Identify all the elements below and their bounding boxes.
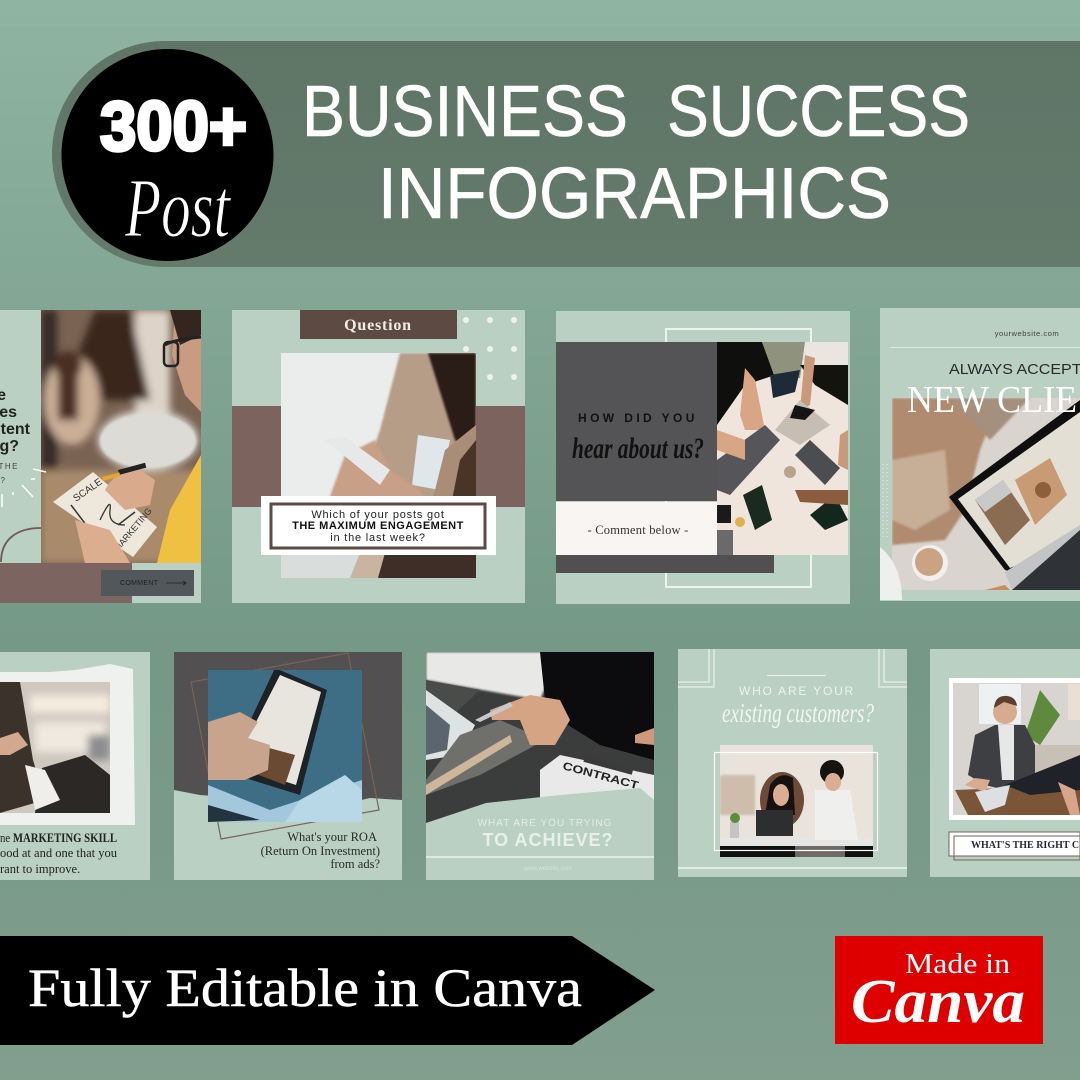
panel: post 2 question (232, 310, 525, 603)
white frame (714, 752, 878, 850)
cut-off question text: tent (1, 421, 31, 438)
cut-off question text (0, 387, 31, 485)
photo: hand with phone (208, 668, 362, 822)
white frame (949, 678, 1080, 820)
caption: ood at and one that you (0, 846, 118, 860)
cut-off question text: g? (0, 438, 19, 455)
caption: ne MARKETING SKILL (0, 831, 117, 845)
white caption box (261, 496, 496, 555)
torn white paper (0, 664, 135, 825)
heading: HOW DID YOU (578, 411, 698, 425)
panel: post 6 ROA (174, 652, 402, 880)
arrow banner: fully editable (0, 936, 655, 1045)
bottom rule (678, 867, 907, 869)
caption banner (949, 832, 1080, 860)
brown band (232, 406, 525, 507)
badge: 300+ post: Post (124, 162, 232, 255)
script line: existing customers? (722, 698, 874, 728)
cream panel: - Comment below - (588, 523, 688, 537)
badge: made in canva: Made in (905, 948, 1011, 980)
caption: from ads? (330, 857, 380, 871)
heading small: WHAT ARE YOU TRYING (478, 818, 612, 829)
photo: team laptops on table (717, 342, 848, 555)
title: SUCCESS (667, 72, 970, 152)
rule (426, 856, 654, 858)
top rule (767, 675, 826, 676)
caption: What's your ROA (287, 830, 377, 844)
white caption box: THE MAXIMUM ENGAGEMENT (292, 520, 464, 532)
question label: Question (344, 317, 412, 334)
script line: hear about us? (572, 432, 704, 465)
title: INFOGRAPHICS (378, 154, 891, 234)
white caption box: in the last week? (330, 532, 426, 544)
cut-off question text: ? (1, 476, 6, 485)
question label (300, 310, 457, 339)
arrow banner: fully editable: Fully Editable in Canva (28, 958, 582, 1018)
badge: made in canva: Canva (851, 968, 1025, 1036)
photo: two colleagues (720, 745, 873, 857)
heading large: TO ACHIEVE? (482, 830, 614, 850)
panel: post 1 marketing (0, 310, 201, 603)
panel: post 5 marketing skill (0, 652, 150, 880)
panel: post 7 contract (426, 652, 654, 880)
white frame (666, 329, 811, 587)
photo: contract signing (426, 652, 654, 823)
badge: made in canva (835, 936, 1043, 1044)
rotated brown frame (191, 653, 379, 839)
white caption box: Which of your posts got (311, 509, 445, 521)
caption (0, 831, 118, 876)
photo: laptop flowers coffee (892, 398, 1080, 590)
heading: WHO ARE YOUR (739, 684, 855, 698)
comment button (101, 570, 194, 596)
heading small: ALWAYS ACCEPTI (949, 361, 1080, 378)
website label: yourwebsite.com (995, 329, 1059, 338)
panel: post 9 right choice (930, 649, 1080, 877)
photo: contract signing: CONTRACT (561, 760, 640, 792)
photo: phone and bag (0, 682, 110, 813)
banner bar (52, 41, 1080, 267)
burst lines (2, 469, 46, 507)
title (302, 72, 970, 234)
header banner (52, 41, 1080, 267)
photo: notebook scale marketing: SCALE (71, 476, 105, 504)
dotted column (883, 464, 887, 540)
torn mint bottom (426, 788, 654, 880)
photo: woman with phone (281, 353, 476, 578)
photo: businessman (953, 683, 1080, 815)
dark torn top (174, 652, 402, 805)
caption: rant to improve. (0, 862, 80, 876)
photo: notebook scale marketing: MARKETING (112, 506, 154, 553)
panel: post 8 existing customers (678, 649, 907, 877)
brown bar (0, 563, 132, 603)
rule (890, 347, 1080, 348)
dark panel (556, 342, 717, 501)
caption: (Return On Investment) (261, 844, 380, 858)
corner lines (678, 649, 907, 687)
title: BUSINESS (302, 72, 628, 152)
caption (261, 830, 380, 871)
badge: 300+ post: 300+ (100, 87, 247, 165)
website: www.website.com (523, 866, 572, 872)
dots (463, 317, 517, 380)
badge: 300+ post (62, 49, 274, 261)
panel: post 3 how did you hear (556, 311, 850, 604)
panel: post 4 new clients (880, 308, 1080, 601)
dark bottom bar (556, 555, 774, 573)
cream panel (556, 502, 717, 555)
comment button: COMMENT (120, 580, 159, 587)
brown arc (1, 528, 41, 562)
photo: notebook scale marketing (41, 310, 201, 563)
caption banner: WHAT'S THE RIGHT C (971, 840, 1079, 851)
striped half circle (880, 547, 902, 600)
